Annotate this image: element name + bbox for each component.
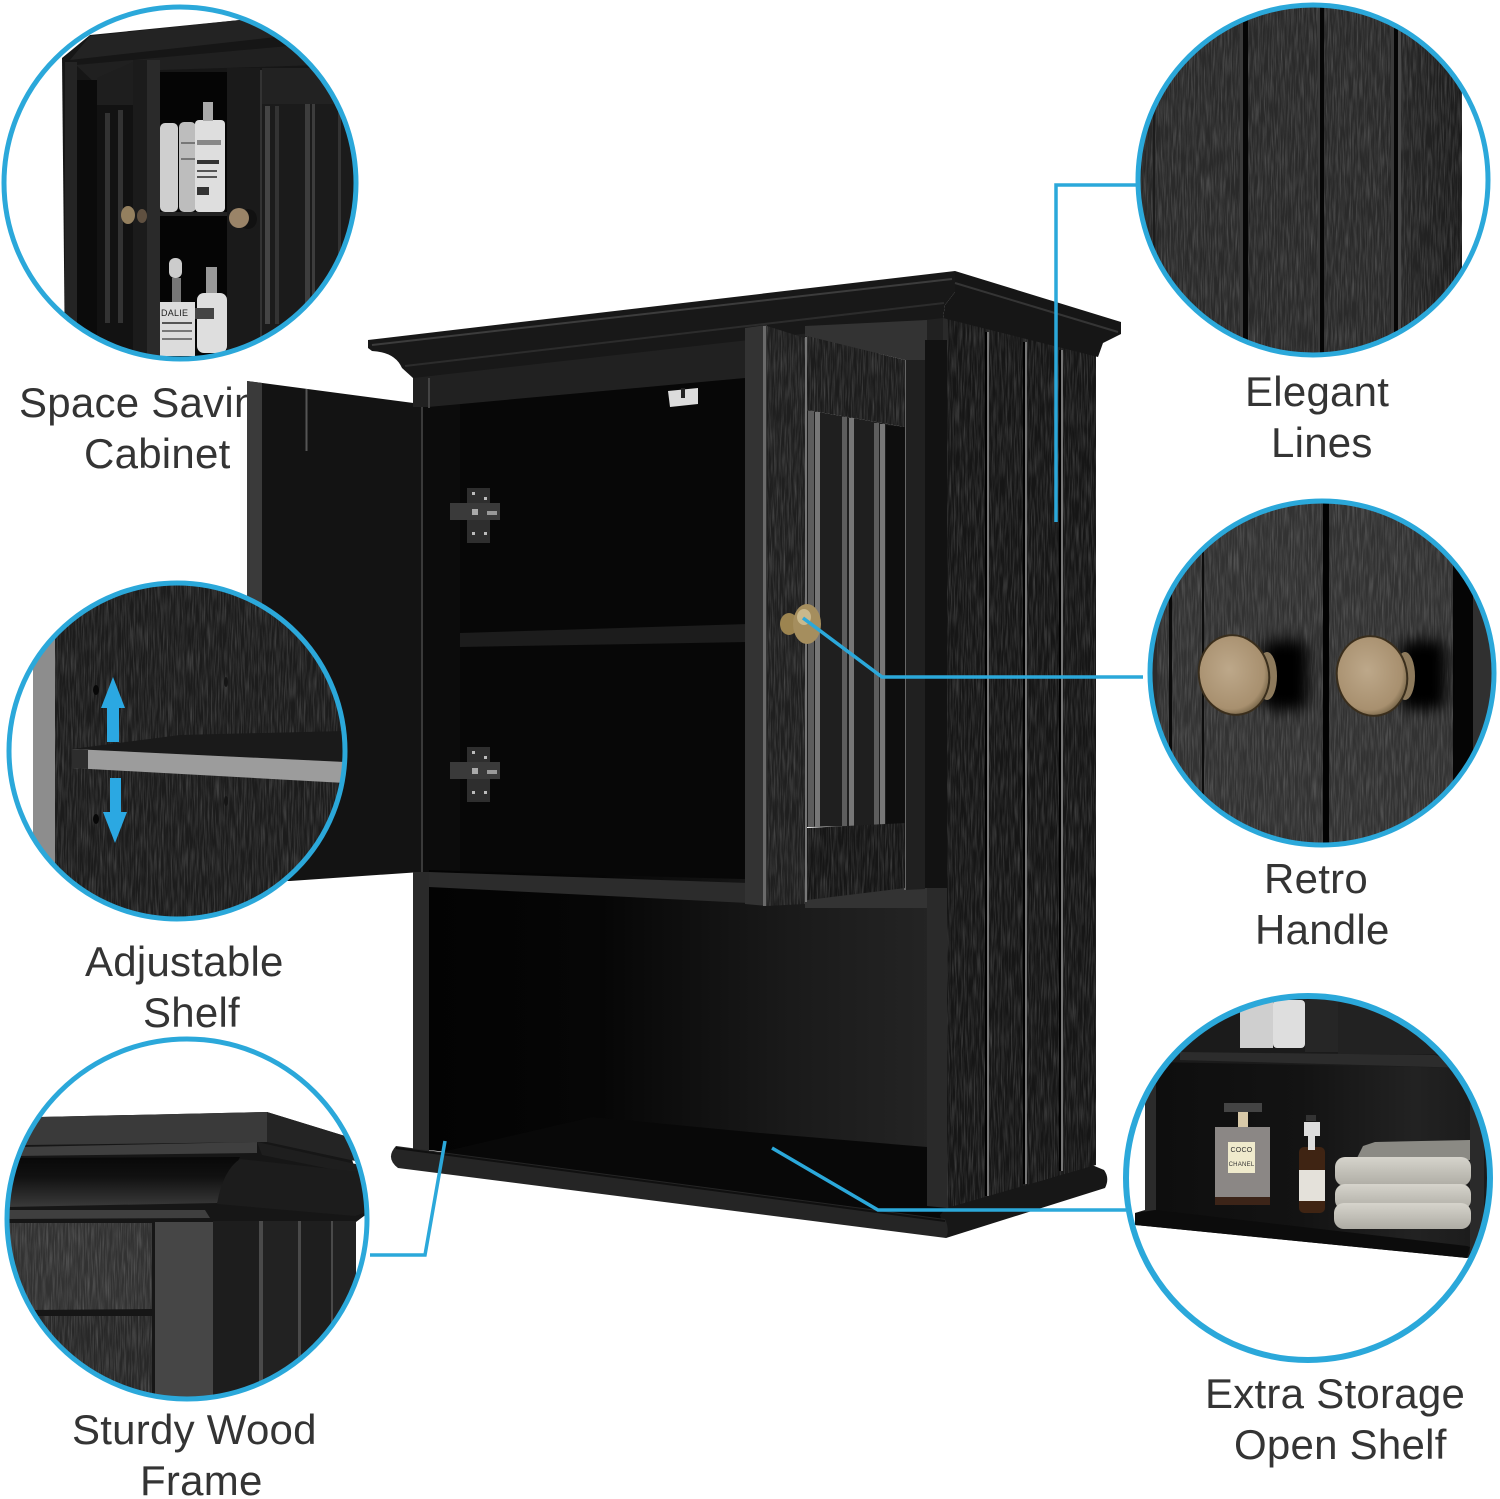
label: Adjustable Shelf: Shelf xyxy=(143,989,240,1036)
label: Retro Handle: Handle xyxy=(1255,906,1390,953)
circle: space saving cabinet detail xyxy=(4,7,360,365)
wall mount bracket xyxy=(668,388,698,407)
lower open compartment xyxy=(413,870,947,1226)
perfume bottle: CHANEL xyxy=(1229,1162,1255,1168)
door knob xyxy=(780,604,821,644)
bottles lower shelf xyxy=(160,258,227,356)
right knob xyxy=(1336,635,1415,717)
label: Extra Storage Open Shelf: Extra Storage xyxy=(1205,1370,1465,1417)
crown moulding xyxy=(368,271,1121,408)
bottles lower shelf: DALIE xyxy=(161,308,188,318)
shelf xyxy=(72,731,345,783)
label: Space Saving Cabinet: Space Saving xyxy=(19,379,281,426)
folded towels xyxy=(1334,1140,1471,1229)
label: Extra Storage Open Shelf: Open Shelf xyxy=(1234,1421,1447,1468)
hinge lower xyxy=(450,747,500,802)
open right door xyxy=(745,320,947,908)
circle: extra storage open shelf detail xyxy=(1126,990,1500,1360)
circle: adjustable shelf detail xyxy=(9,575,355,935)
callout line: Retro Handle xyxy=(803,618,1143,677)
open left door xyxy=(247,381,421,881)
circle: elegant lines detail xyxy=(1130,0,1488,360)
small knobs xyxy=(121,206,257,229)
left knob xyxy=(1198,634,1277,716)
label: Sturdy Wood Frame: Sturdy Wood xyxy=(72,1406,317,1453)
bottles upper shelf xyxy=(160,102,225,212)
label: Space Saving Cabinet: Cabinet xyxy=(84,430,231,477)
callout line: Sturdy Wood Frame xyxy=(370,1141,445,1255)
main cabinet xyxy=(247,271,1121,1238)
callout line: Extra Storage xyxy=(772,1148,1126,1210)
right side panel xyxy=(947,310,1096,1208)
label: Elegant Lines: Lines xyxy=(1271,419,1373,466)
perfume bottle: COCO xyxy=(1230,1147,1253,1154)
hinge upper xyxy=(450,488,500,543)
callout line: Elegant Lines xyxy=(1056,185,1137,522)
icon: down arrow xyxy=(103,778,127,843)
label: Retro Handle: Retro xyxy=(1264,855,1368,902)
upper compartment interior xyxy=(421,376,750,890)
label: Elegant Lines: Elegant xyxy=(1245,368,1389,415)
front right stile xyxy=(927,318,947,1208)
perfume bottle xyxy=(1215,1103,1270,1205)
lower shelf edge xyxy=(429,872,748,903)
circle: retro handle detail xyxy=(1140,490,1500,860)
circle: sturdy wood frame detail xyxy=(5,1039,368,1402)
base plinth xyxy=(391,1146,1107,1238)
knob shadow xyxy=(1262,640,1446,710)
icon: up arrow xyxy=(101,677,125,742)
spray bottle xyxy=(1299,1115,1325,1213)
middle shelf xyxy=(460,624,748,647)
label: Adjustable Shelf: Adjustable xyxy=(85,938,284,985)
